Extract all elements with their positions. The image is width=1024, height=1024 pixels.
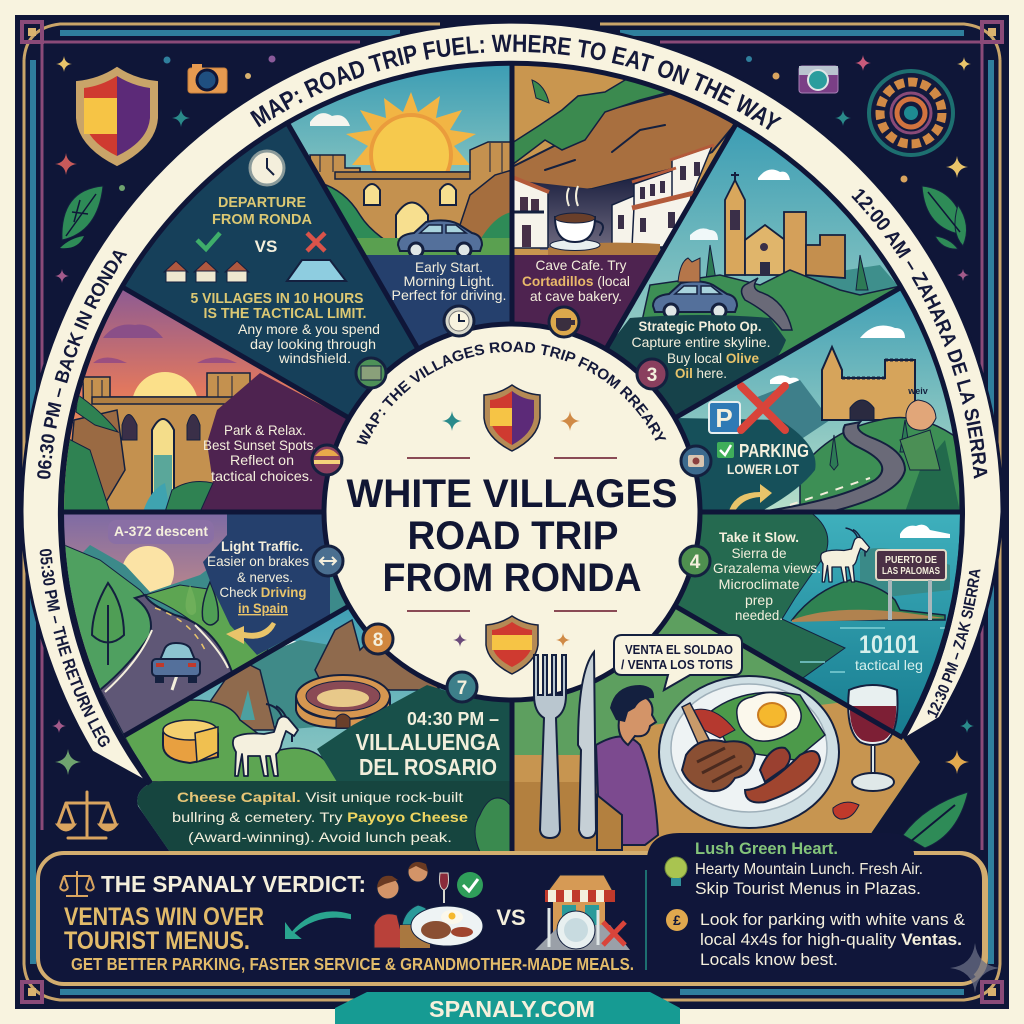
text: cave cafe bbox=[522, 257, 630, 304]
panel: Villaluenga del Rosario bbox=[124, 609, 510, 851]
text: light traffic: in Spain bbox=[238, 600, 288, 616]
decorative stars lower left bbox=[52, 719, 81, 775]
text: Villaluenga heading: 04:30 PM – bbox=[407, 708, 499, 729]
illustration: cheese wheel bbox=[163, 720, 218, 763]
text: light traffic: Check Driving bbox=[220, 584, 306, 600]
text: Villaluenga details: bullring & cemetery. Try Payoyo Cheese bbox=[172, 809, 468, 825]
ring label: road trip fuel: MAP: ROAD TRIP FUEL: WHERE TO EAT ON THE WAY bbox=[250, 34, 782, 130]
badge: sunset bbox=[312, 445, 342, 475]
panel: return leg descent bbox=[60, 512, 350, 742]
icon: green leaf lower right bbox=[903, 792, 968, 848]
icon: Spanish shield top left bbox=[77, 68, 157, 165]
icon: knife bbox=[578, 652, 596, 838]
icon: pound coin: £ bbox=[673, 912, 681, 928]
badge: step 4: 4 bbox=[690, 552, 701, 573]
panel: take it slow bbox=[678, 514, 960, 734]
scene: hilltop church and castle bbox=[610, 126, 898, 414]
badge: two-way arrows bbox=[313, 546, 343, 576]
icon: chili bbox=[833, 802, 859, 819]
badge: clock bbox=[444, 306, 474, 336]
text: lush green heart bbox=[695, 839, 923, 898]
text: departure heading bbox=[212, 195, 313, 228]
text: light traffic bbox=[207, 538, 309, 616]
callout: venta names: / VENTA LOS TOTIS bbox=[621, 658, 733, 672]
text: cave cafe: at cave bakery. bbox=[530, 288, 622, 304]
icon: green check bbox=[197, 233, 220, 249]
decorative items lower right bbox=[945, 719, 974, 774]
panel: departure from Ronda bbox=[124, 124, 418, 418]
scene: Ronda bridge at sunrise bbox=[288, 64, 512, 355]
text: take it slow bbox=[713, 529, 821, 623]
text: departure heading: DEPARTURE bbox=[218, 195, 306, 211]
text: Villaluenga details: (Award-winning). Avoid lunch peak. bbox=[188, 829, 452, 845]
badge: step 8 bbox=[363, 624, 393, 654]
text: take it slow: Sierra de bbox=[732, 545, 787, 561]
text: park and relax: Reflect on bbox=[230, 452, 294, 468]
title: FROM RONDA bbox=[382, 556, 642, 600]
icon: tourist restaurant with crossed-out plate bbox=[535, 875, 630, 950]
panel: centre title disc bbox=[322, 322, 702, 702]
icon: parking check bbox=[717, 442, 734, 458]
text: parking lower lot bbox=[727, 441, 809, 477]
text: light traffic: & nerves. bbox=[237, 569, 293, 585]
illustration: diners with plate bbox=[374, 862, 483, 948]
text: strategic photo op: Capture entire skyline. bbox=[632, 334, 770, 350]
panel: Spanaly verdict bbox=[38, 853, 986, 984]
ring label: Zahara de la Sierra: 12:00 AM – ZAHARA DE LA SIERRA bbox=[851, 189, 988, 479]
text: Villaluenga heading: VILLALUENGA bbox=[356, 729, 500, 755]
scene: table backdrop bbox=[514, 609, 920, 851]
text: tactical limit: IS THE TACTICAL LIMIT. bbox=[204, 306, 366, 322]
stat: 10101 tactical leg: 10101 bbox=[859, 631, 919, 659]
text: vs: VS bbox=[496, 905, 526, 930]
scene: A-372 road at dusk bbox=[60, 512, 350, 742]
text: tactical limit bbox=[190, 291, 366, 322]
text: parking lower lot: PARKING bbox=[739, 441, 809, 461]
title: WHITE VILLAGES bbox=[346, 472, 678, 516]
icon: windshield bbox=[287, 260, 346, 281]
icon: green leaf top left bbox=[60, 186, 103, 248]
text: early start bbox=[392, 259, 506, 303]
ring label: Zak Sierra: 12:30 PM – ZAK SIERRA bbox=[928, 570, 980, 718]
text: take it slow: Grazalema views. bbox=[713, 560, 821, 576]
badge: camera bbox=[681, 446, 711, 476]
icon: green leaf top right bbox=[922, 186, 967, 249]
label: view: weiv bbox=[907, 386, 928, 396]
text: benefits: GET BETTER PARKING, FASTER SERVICE & GRANDMOTHER-MADE MEALS. bbox=[71, 954, 634, 974]
badge: step 3: 3 bbox=[647, 365, 657, 386]
sign: Puerto de las Palomas: LAS PALOMAS bbox=[882, 566, 940, 577]
badge: map bbox=[356, 358, 386, 388]
text: ventas win bbox=[64, 903, 264, 955]
icon: small scales bbox=[60, 871, 94, 896]
icon: fork bbox=[534, 655, 566, 838]
icon: parking sign crossed out: P bbox=[715, 403, 733, 433]
watermark sparkle bbox=[950, 943, 1000, 993]
ring label: return leg: 05:30 PM – THE RETURN LEG bbox=[40, 549, 110, 748]
label: A-372 descent bbox=[108, 520, 214, 544]
badge: step 8: 8 bbox=[373, 630, 383, 651]
sector divider lines bbox=[60, 63, 962, 852]
text: strategic photo op: Oil here. bbox=[675, 365, 727, 381]
scene: Zahara castle and road bbox=[678, 290, 960, 510]
text: Villaluenga details bbox=[172, 789, 468, 845]
scene: Ronda bridge at sunset bbox=[64, 290, 346, 510]
heading: verdict: THE SPANALY VERDICT: bbox=[101, 871, 366, 897]
panel: strategic photo op bbox=[610, 126, 898, 414]
text: parking tip: Look for parking with white vans & bbox=[700, 910, 966, 929]
text: strategic photo op: Strategic Photo Op. bbox=[638, 318, 762, 334]
text: Villaluenga heading bbox=[356, 708, 500, 780]
text: park and relax: Best Sunset Spots. bbox=[203, 437, 317, 453]
text: Villaluenga heading: DEL ROSARIO bbox=[359, 754, 497, 780]
text: strategic photo op: Buy local Olive bbox=[667, 350, 759, 366]
panel: cave cafe bbox=[512, 64, 736, 355]
badge: step 7: 7 bbox=[457, 678, 467, 699]
text: parking tip bbox=[700, 910, 966, 969]
divider bbox=[645, 870, 647, 970]
outer ring bbox=[22, 22, 1002, 784]
footer tab: SPANALY.COM bbox=[429, 996, 595, 1022]
ring label: back in Ronda: 06:30 PM – BACK IN RONDA bbox=[37, 250, 128, 479]
text: windshield warning: Any more & you spend bbox=[238, 321, 380, 337]
decorative sparkles bbox=[442, 411, 580, 647]
text: parking lower lot: LOWER LOT bbox=[727, 462, 800, 477]
badge: step 3 bbox=[637, 359, 667, 389]
badge: step 4 bbox=[680, 546, 710, 576]
stat: 10101 tactical leg bbox=[855, 631, 923, 673]
sign: Puerto de las Palomas bbox=[882, 555, 940, 577]
icon: scales of justice bbox=[58, 792, 116, 838]
text: take it slow: Microclimate bbox=[718, 576, 800, 592]
sector background bbox=[124, 124, 418, 418]
label: A-372 descent: A-372 descent bbox=[114, 523, 208, 539]
title rules bbox=[407, 458, 617, 611]
text: windshield warning bbox=[238, 321, 380, 366]
text: vs: VS bbox=[255, 237, 277, 256]
icon: orange camera bbox=[188, 64, 227, 93]
callout: venta names: VENTA EL SOLDAO bbox=[625, 643, 733, 657]
panel: tips box bbox=[647, 833, 1000, 993]
title bbox=[346, 472, 678, 600]
stat: 10101 tactical leg: tactical leg bbox=[855, 657, 923, 673]
icon: three white-village houses bbox=[164, 261, 249, 282]
scene: Grazalema lake and goat bbox=[678, 514, 960, 734]
icon: red cross bbox=[307, 233, 325, 251]
text: park and relax: Park & Relax. bbox=[224, 422, 306, 438]
text: lush green heart: Skip Tourist Menus in Plazas. bbox=[695, 880, 921, 898]
text: tactical limit: 5 VILLAGES IN 10 HOURS bbox=[190, 291, 364, 307]
panel: parking bbox=[678, 290, 960, 510]
icon: light bulb bbox=[665, 857, 687, 886]
badge: step 7 bbox=[447, 672, 477, 702]
text: take it slow: prep bbox=[745, 592, 773, 608]
illustration: goat bbox=[233, 704, 298, 776]
text: light traffic: Easier on brakes bbox=[207, 553, 309, 569]
footer tab bbox=[335, 992, 680, 1024]
arrow: green back to ventas bbox=[286, 912, 350, 938]
arrow: curved gold bbox=[226, 622, 276, 644]
text: park and relax bbox=[203, 422, 317, 484]
text: take it slow: needed. bbox=[735, 607, 783, 623]
icon: parking sign crossed out bbox=[709, 386, 785, 433]
text: early start: Perfect for driving. bbox=[392, 287, 506, 303]
text: parking tip: local 4x4s for high-quality Ventas. bbox=[700, 930, 962, 949]
text: windshield warning: windshield. bbox=[278, 350, 351, 366]
icon: shield bottom bbox=[486, 616, 538, 674]
scene: bullring, rocks, goat and cheese bbox=[124, 609, 510, 851]
title: ROAD TRIP bbox=[408, 514, 618, 558]
sign: Puerto de las Palomas: PUERTO DE bbox=[885, 555, 937, 566]
scene: cave village bbox=[512, 64, 736, 355]
curved label: WAP: THE VILLAGES ROAD TRIP FROM RREARY bbox=[356, 342, 666, 444]
text: strategic photo op bbox=[632, 318, 770, 381]
badge: coffee bbox=[549, 307, 579, 337]
text: departure heading: FROM RONDA bbox=[212, 212, 313, 228]
decorative stars left bbox=[55, 56, 276, 283]
text: light traffic: Light Traffic. bbox=[221, 538, 303, 554]
icon: pound coin bbox=[665, 908, 689, 932]
illustration: red wine glass bbox=[848, 685, 898, 791]
text: lush green heart: Lush Green Heart. bbox=[695, 839, 838, 858]
text: cave cafe: Cave Cafe. Try bbox=[536, 257, 626, 273]
decorative stars right bbox=[746, 55, 971, 281]
icon: shield top bbox=[484, 385, 540, 451]
panel: park and relax bbox=[64, 290, 346, 510]
text: parking tip: Locals know best. bbox=[700, 950, 838, 969]
text: early start: Early Start. bbox=[415, 259, 483, 275]
arrow: to lower lot bbox=[729, 484, 772, 511]
callout: venta names bbox=[614, 635, 742, 690]
text: ventas win: VENTAS WIN OVER bbox=[64, 903, 264, 931]
text: cave cafe: Cortadillos (local bbox=[522, 273, 630, 289]
figure: diner bbox=[596, 685, 658, 850]
icon: wall clock bbox=[250, 151, 284, 185]
icon: rear-view car bbox=[152, 643, 200, 683]
panel: lunch bbox=[514, 609, 920, 851]
text: Villaluenga details: Cheese Capital. Visit unique rock-built bbox=[177, 789, 463, 805]
text: early start: Morning Light. bbox=[404, 273, 494, 289]
icon: mandala medallion bbox=[869, 71, 953, 155]
panel: early start bbox=[288, 64, 512, 355]
text: lush green heart: Hearty Mountain Lunch. Fresh Air. bbox=[695, 861, 923, 878]
text: windshield warning: day looking through bbox=[250, 336, 376, 352]
text: take it slow: Take it Slow. bbox=[719, 529, 799, 545]
icon: green check circle bbox=[457, 872, 483, 898]
text: ventas win: TOURIST MENUS. bbox=[64, 927, 250, 955]
illustration: mixed grill plate bbox=[659, 676, 839, 828]
text: park and relax: tactical choices. bbox=[211, 468, 313, 484]
icon: purple camera bbox=[799, 66, 838, 93]
